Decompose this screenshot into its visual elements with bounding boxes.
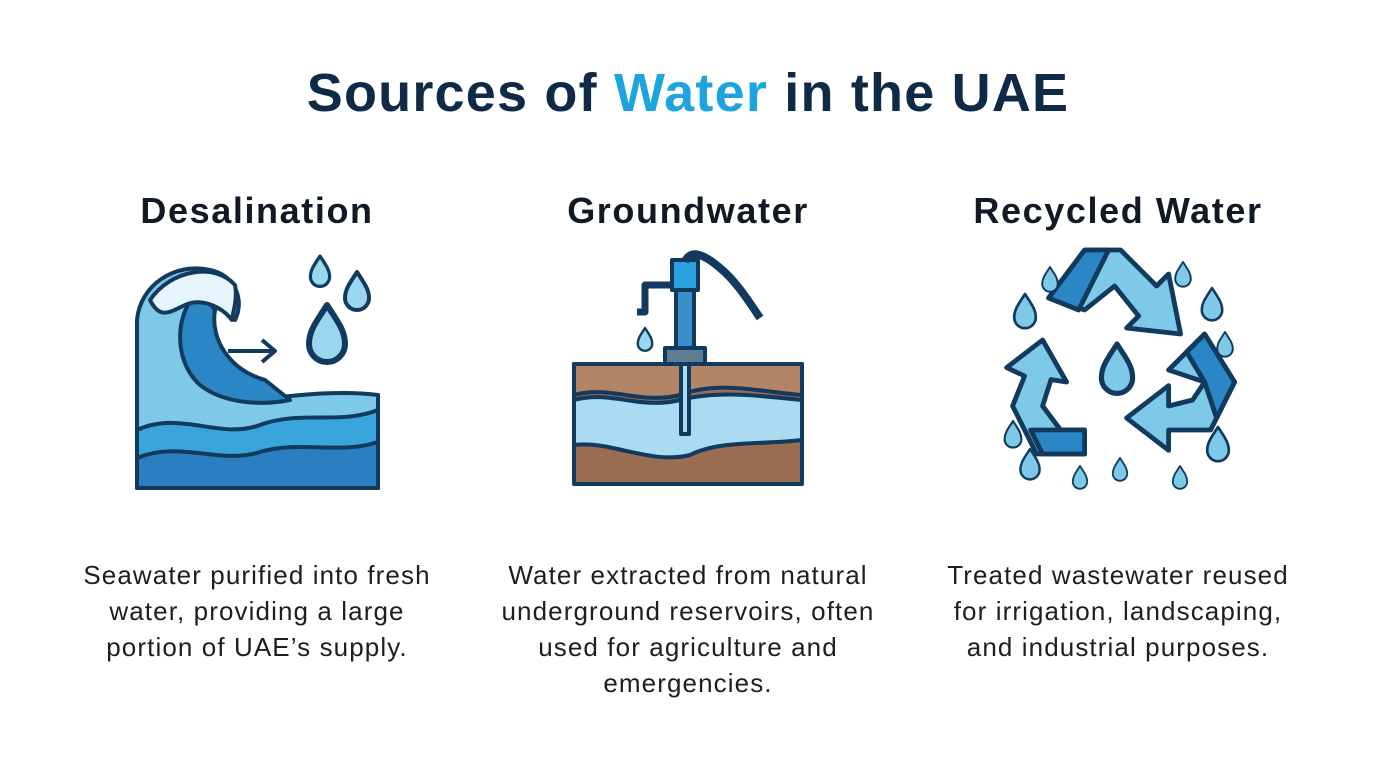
text: groundwater: Water extracted from natural	[508, 560, 868, 590]
text: desalination	[83, 560, 431, 662]
text: desalination: water, providing a large	[109, 596, 405, 626]
text: recycled: for irrigation, landscaping,	[954, 596, 1282, 626]
icon: groundwater pump	[574, 254, 802, 484]
text: groundwater	[502, 560, 874, 698]
heading: groundwater: Groundwater	[567, 190, 809, 231]
heading: desalination: Desalination	[140, 190, 374, 231]
title: Sources of Water in the UAE	[307, 63, 1069, 123]
text: groundwater: used for agriculture and	[538, 632, 838, 662]
icon: wave to droplets	[137, 256, 378, 488]
text: groundwater: emergencies.	[603, 668, 773, 698]
text: recycled	[947, 560, 1289, 662]
heading: recycled: Recycled Water	[973, 190, 1263, 231]
icon: recycle water	[1005, 250, 1235, 489]
text: recycled: Treated wastewater reused	[947, 560, 1289, 590]
text: groundwater: underground reservoirs, often	[502, 596, 874, 626]
text: desalination: Seawater purified into fresh	[83, 560, 431, 590]
text: desalination: portion of UAE’s supply.	[106, 632, 408, 662]
text: recycled: and industrial purposes.	[967, 632, 1269, 662]
